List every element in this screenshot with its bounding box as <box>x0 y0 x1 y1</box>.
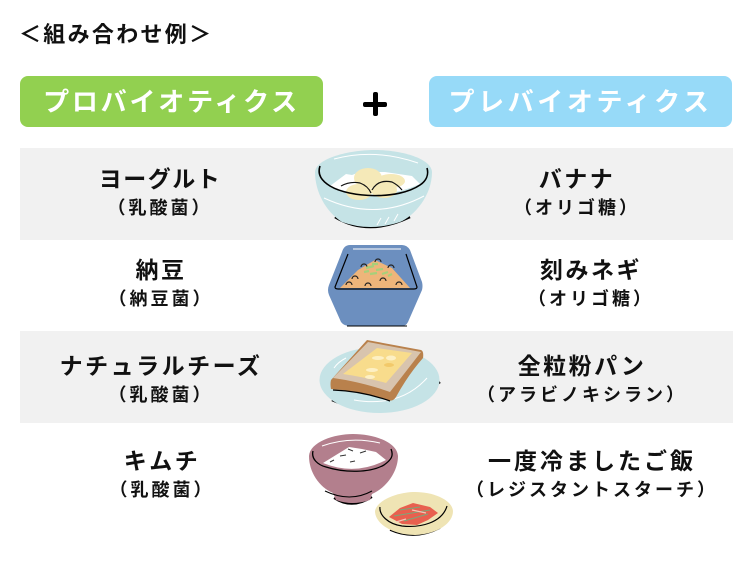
row 3 right: whole grain bread <box>477 353 687 405</box>
row 2 left: natto: （納豆菌） <box>108 289 214 309</box>
icon: rice bowl <box>309 434 398 504</box>
heading: probiotics <box>20 76 323 127</box>
row 1 right: banana: バナナ <box>539 166 615 192</box>
row 3 right: whole grain bread: 全粒粉パン <box>518 353 646 379</box>
heading: probiotics: プロバイオティクス <box>43 87 300 117</box>
row 4 right: cooled rice: （レジスタントスターチ） <box>466 480 718 500</box>
row 1 left: yogurt: ヨーグルト <box>99 166 221 192</box>
title: ＜組み合わせ例＞ <box>19 22 213 47</box>
icon: banana yogurt bowl <box>315 150 432 227</box>
row 2 left: natto <box>108 257 214 309</box>
row 2 right: chopped green onion: （オリゴ糖） <box>528 289 654 309</box>
row 2 right: chopped green onion <box>528 257 654 309</box>
icon: bread on plate <box>320 340 440 413</box>
plus sign <box>363 92 387 116</box>
row 1 left: yogurt: （乳酸菌） <box>108 198 212 218</box>
row 4 left: kimchi: キムチ <box>124 448 200 474</box>
row 3 left: natural cheese: （乳酸菌） <box>108 385 214 405</box>
icon: natto in blue bowl <box>328 245 422 326</box>
heading: prebiotics: プレバイオティクス <box>448 87 713 117</box>
row 4 right: cooled rice: 一度冷ましたご飯 <box>488 448 696 474</box>
row 4 left: kimchi: （乳酸菌） <box>110 480 214 500</box>
icon: kimchi dish <box>375 492 453 535</box>
row 3 left: natural cheese <box>60 353 262 405</box>
row 1 right: banana: （オリゴ糖） <box>514 198 640 218</box>
row 2 right: chopped green onion: 刻みネギ <box>540 257 642 283</box>
row 2 left: natto: 納豆 <box>136 257 186 283</box>
row 4 right: cooled rice <box>466 448 718 500</box>
row 3 right: whole grain bread: （アラビノキシラン） <box>477 385 687 405</box>
row 4 left: kimchi <box>110 448 214 500</box>
row 1 left: yogurt <box>99 166 221 218</box>
row 3 left: natural cheese: ナチュラルチーズ <box>60 353 262 379</box>
row 1 right: banana <box>514 166 640 218</box>
heading: prebiotics <box>429 76 732 127</box>
